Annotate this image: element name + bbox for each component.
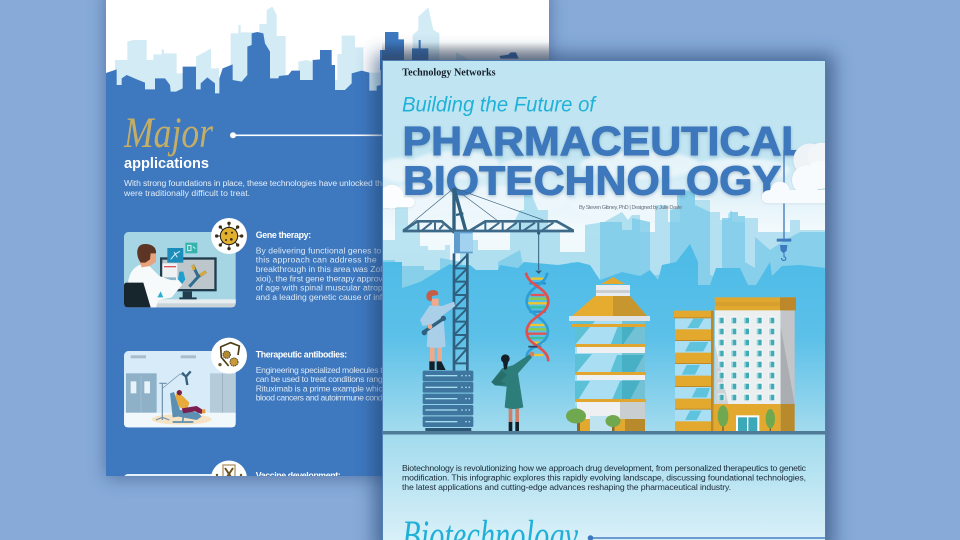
text: gene therapy body <box>256 245 383 302</box>
cloud: left <box>377 185 415 209</box>
text: therapeutic antibodies body <box>256 367 382 400</box>
sky city foreground <box>382 244 826 432</box>
title: Pharmaceutical Biotechnology: PHARMACEUTICAL <box>402 118 808 164</box>
heading: therapeutic antibodies: Therapeutic antibodies: <box>256 350 347 360</box>
text: gene therapy body: and a leading genetic cause of inf <box>256 292 383 302</box>
heading connector line <box>588 535 826 540</box>
logo: Technology Networks: Technology Networks <box>402 68 496 79</box>
icon: gene therapy virus <box>211 218 247 254</box>
intro paragraph: the latest applications and cutting-edge advances reshaping the pharmaceutical industry. <box>402 482 731 492</box>
DNA helix <box>526 273 548 361</box>
intro text: With strong foundations in place, these technologies have unlocked th <box>124 178 382 188</box>
intro paragraph: Biotechnology is revolutionizing how we approach drug development, from personalized therapeutics to genetic <box>402 463 807 473</box>
text: therapeutic antibodies body: Rituximab is a prime example whic <box>256 383 383 393</box>
byline: By Steven Gibney, PhD | Designed by Julie Davie <box>579 205 682 211</box>
heading: gene therapy: Gene therapy: <box>256 230 311 240</box>
figure: woman reaching for DNA <box>491 347 537 431</box>
back clouds <box>383 150 790 202</box>
building: central glass tower <box>569 277 650 432</box>
text: gene therapy body: breakthrough in this area was Zol <box>256 264 382 274</box>
figure: engineer with wrench <box>420 290 455 370</box>
text: gene therapy body: xioi), the first gene therapy approv <box>256 273 383 283</box>
server stack <box>423 371 473 431</box>
panel: back page major applications <box>105 0 549 496</box>
intro paragraph: modification. This infographic explores this rapidly evolving landscape, discussing foundational technologies, <box>402 472 806 482</box>
intro paragraph <box>402 463 807 492</box>
crane <box>403 188 574 371</box>
title: Pharmaceutical Biotechnology <box>403 126 797 198</box>
text: gene therapy body: this approach can address the <box>256 254 377 264</box>
illustration: scientist at computer <box>124 232 236 307</box>
heading: Major applications: Major <box>123 110 213 157</box>
cloud: right <box>761 142 825 204</box>
text: gene therapy body: of age with spinal muscular atrop <box>256 283 383 293</box>
back page shadow <box>106 0 549 478</box>
front page edge <box>382 60 826 540</box>
icon: therapeutic antibodies shield <box>211 338 247 374</box>
text: therapeutic antibodies body: blood cancers and autoimmune cond <box>256 393 383 403</box>
heading: Major applications <box>124 118 214 171</box>
lower panel background <box>382 434 826 540</box>
front page shadow <box>374 54 834 540</box>
heading connector line <box>230 132 383 138</box>
trees by central tower <box>566 408 620 431</box>
crane hook <box>777 150 791 260</box>
city skyline background <box>382 190 826 290</box>
title: Pharmaceutical Biotechnology: BIOTECHNOLOGY <box>403 157 781 203</box>
panel: front page cover <box>377 60 836 540</box>
illustration: antibody infusion room <box>124 351 236 427</box>
text: gene therapy body: By delivering functional genes to <box>256 245 381 255</box>
trees by hotel block <box>718 405 775 431</box>
ground line <box>382 431 826 434</box>
building: hotel block <box>674 297 796 431</box>
text: therapeutic antibodies body: can be used to treat conditions rang <box>256 374 383 384</box>
back page skyline <box>105 7 519 100</box>
intro text <box>124 180 382 198</box>
heading: Major applications: applications <box>124 156 209 172</box>
intro text: were traditionally difficult to treat. <box>123 188 250 198</box>
text: therapeutic antibodies body: Engineering specialized molecules t <box>256 365 383 375</box>
subtitle: Building the Future of: Building the Future of <box>402 94 597 116</box>
heading: vaccine development: Vaccine development: <box>256 470 341 480</box>
card: vaccine development cut off <box>124 460 247 476</box>
